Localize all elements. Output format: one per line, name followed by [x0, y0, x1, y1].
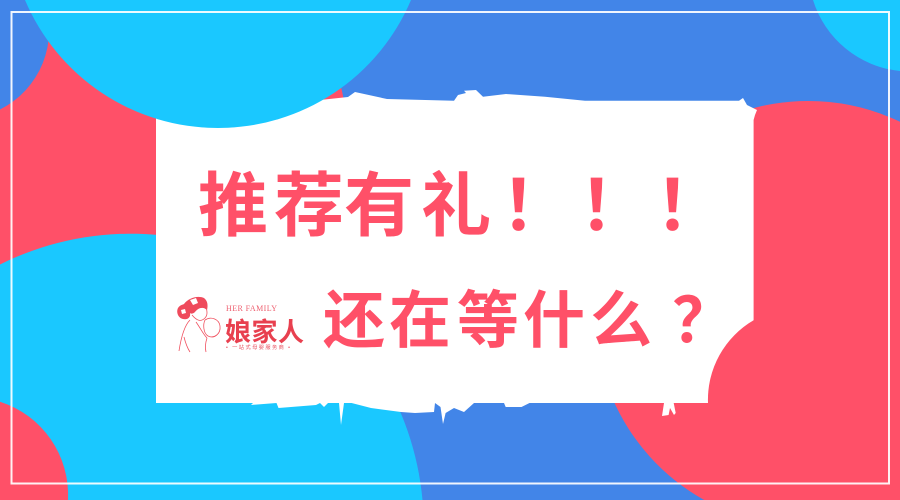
logo name: 娘家人: [225, 317, 304, 347]
right red circle: [595, 101, 900, 500]
torn white paper panel: [156, 90, 757, 425]
top cyan circle: [25, 0, 411, 128]
logo tagline: HER FAMILY: HER FAMILY: [226, 304, 277, 313]
lower-left cyan circle: [0, 234, 422, 500]
headline: 还在等什么: 还在等什么？: [323, 287, 734, 356]
top-left blue circle: [0, 0, 49, 110]
top-right cyan circle: [813, 0, 900, 71]
lower-right red circle: [708, 320, 754, 403]
logo: 娘家人: [177, 297, 304, 352]
left red circle: [0, 0, 350, 400]
logo slogan: • 一站式母婴服务商 •: [226, 343, 290, 351]
headline: 推荐有礼: 推荐有礼！！！: [198, 167, 725, 245]
icon: mother and baby: [177, 297, 220, 352]
bottom-left red circle: [0, 402, 68, 500]
